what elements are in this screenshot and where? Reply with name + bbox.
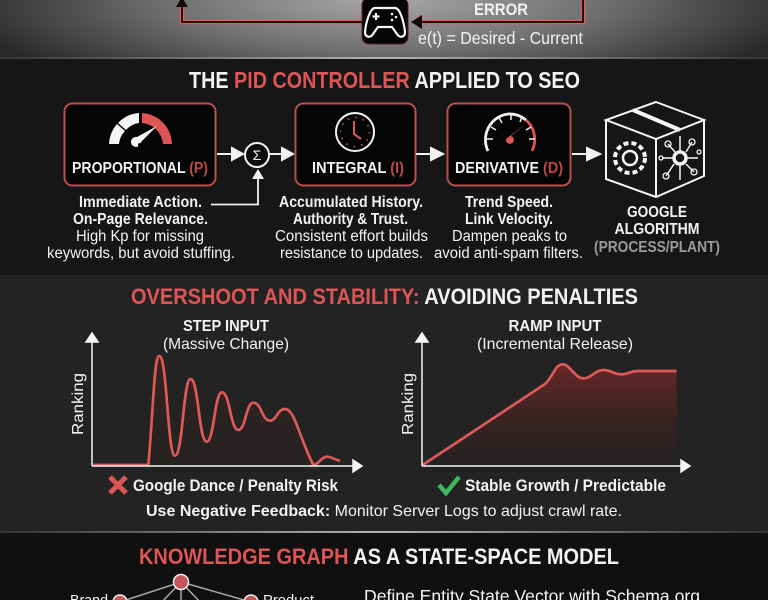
label: derivative: DERIVATIVE (D)	[455, 160, 563, 177]
card: proportional	[64, 104, 216, 186]
error line with left arrow	[411, 0, 583, 29]
text: google algorithm: GOOGLE	[627, 204, 687, 221]
text: proportional description: High Kp for missing	[76, 228, 204, 245]
card: integral	[296, 104, 416, 186]
text: derivative description: Link Velocity.	[465, 211, 553, 228]
text: derivative description: avoid anti-spam filters.	[434, 245, 583, 262]
chart: step input	[70, 318, 362, 495]
icon: algorithm cube	[606, 102, 704, 197]
caption: google dance: Google Dance / Penalty Risk	[133, 476, 338, 495]
chart: ramp input	[400, 318, 690, 495]
text: google algorithm: ALGORITHM	[614, 221, 700, 238]
arrow: proportional to sum	[217, 148, 243, 160]
chart title: ramp input: (Incremental Release)	[477, 336, 633, 353]
text: integral description: Authority & Trust.	[293, 211, 408, 228]
area and line: step response	[93, 356, 340, 465]
panel: PID controller	[0, 57, 768, 275]
text: proportional description: Immediate Action.	[79, 194, 202, 211]
icon: game controller	[362, 0, 408, 44]
card: derivative	[448, 104, 570, 186]
heading: overshoot: OVERSHOOT AND STABILITY: AVOIDING PENALTIES	[131, 284, 638, 309]
panel: overshoot and stability	[0, 275, 768, 532]
text: integral description: Accumulated History.	[279, 194, 423, 211]
text: proportional description: keywords, but avoid stuffing.	[47, 245, 235, 262]
icon: speed gauge	[485, 114, 535, 151]
caption: stable growth: Stable Growth / Predictable	[465, 476, 666, 495]
label: error: ERROR	[474, 0, 528, 19]
label: error formula: e(t) = Desired - Current	[418, 28, 583, 48]
label: integral: INTEGRAL (I)	[312, 160, 404, 177]
arrow: sum to integral	[270, 148, 293, 160]
panel: top feedback loop	[0, 0, 768, 58]
chart title: step input: (Massive Change)	[163, 336, 289, 353]
diagram: entity graph	[70, 574, 315, 600]
icon: clock	[336, 113, 374, 151]
chart title: ramp input: RAMP INPUT	[508, 318, 602, 335]
text: proportional description: On-Page Relevance.	[73, 211, 208, 228]
axes	[86, 333, 362, 472]
icon: sum junction: Σ	[253, 147, 262, 163]
icon: sum junction	[245, 143, 269, 167]
area and line: ramp response	[422, 364, 677, 466]
text: integral description	[275, 194, 428, 262]
axes	[416, 333, 690, 472]
text: integral description: resistance to updates.	[280, 245, 423, 262]
arrow: derivative to plant	[572, 148, 600, 160]
chart title: step input: STEP INPUT	[183, 318, 269, 335]
text: proportional description	[47, 194, 235, 262]
arrow: feedback into sum	[211, 169, 264, 204]
axis label: ranking: Ranking	[70, 373, 87, 435]
heading: knowledge graph: KNOWLEDGE GRAPH AS A STATE-SPACE MODEL	[139, 544, 619, 569]
label: proportional: PROPORTIONAL (P)	[72, 160, 208, 177]
icon: speedometer	[109, 113, 172, 147]
chart title: ramp input	[477, 318, 633, 353]
text: google algorithm	[594, 204, 720, 256]
panel: knowledge graph	[0, 531, 768, 600]
text: google algorithm: (PROCESS/PLANT)	[594, 239, 720, 256]
icon: red cross	[110, 477, 126, 493]
chart title: step input	[163, 318, 289, 353]
text: derivative description	[434, 194, 583, 262]
text: integral description: Consistent effort builds	[275, 228, 428, 245]
text: derivative description: Dampen peaks to	[452, 228, 567, 245]
text: derivative description: Trend Speed.	[465, 194, 553, 211]
icon: green check	[439, 477, 459, 493]
arrow: integral to derivative	[416, 148, 443, 160]
heading: PID controller: THE PID CONTROLLER APPLIED TO SEO	[189, 67, 580, 93]
text: negative feedback note: Use Negative Feedback: Monitor Server Logs to adjust crawl rate.	[146, 503, 622, 520]
feedback line with up arrow	[176, 0, 362, 22]
axis label: ranking: Ranking	[400, 373, 417, 435]
